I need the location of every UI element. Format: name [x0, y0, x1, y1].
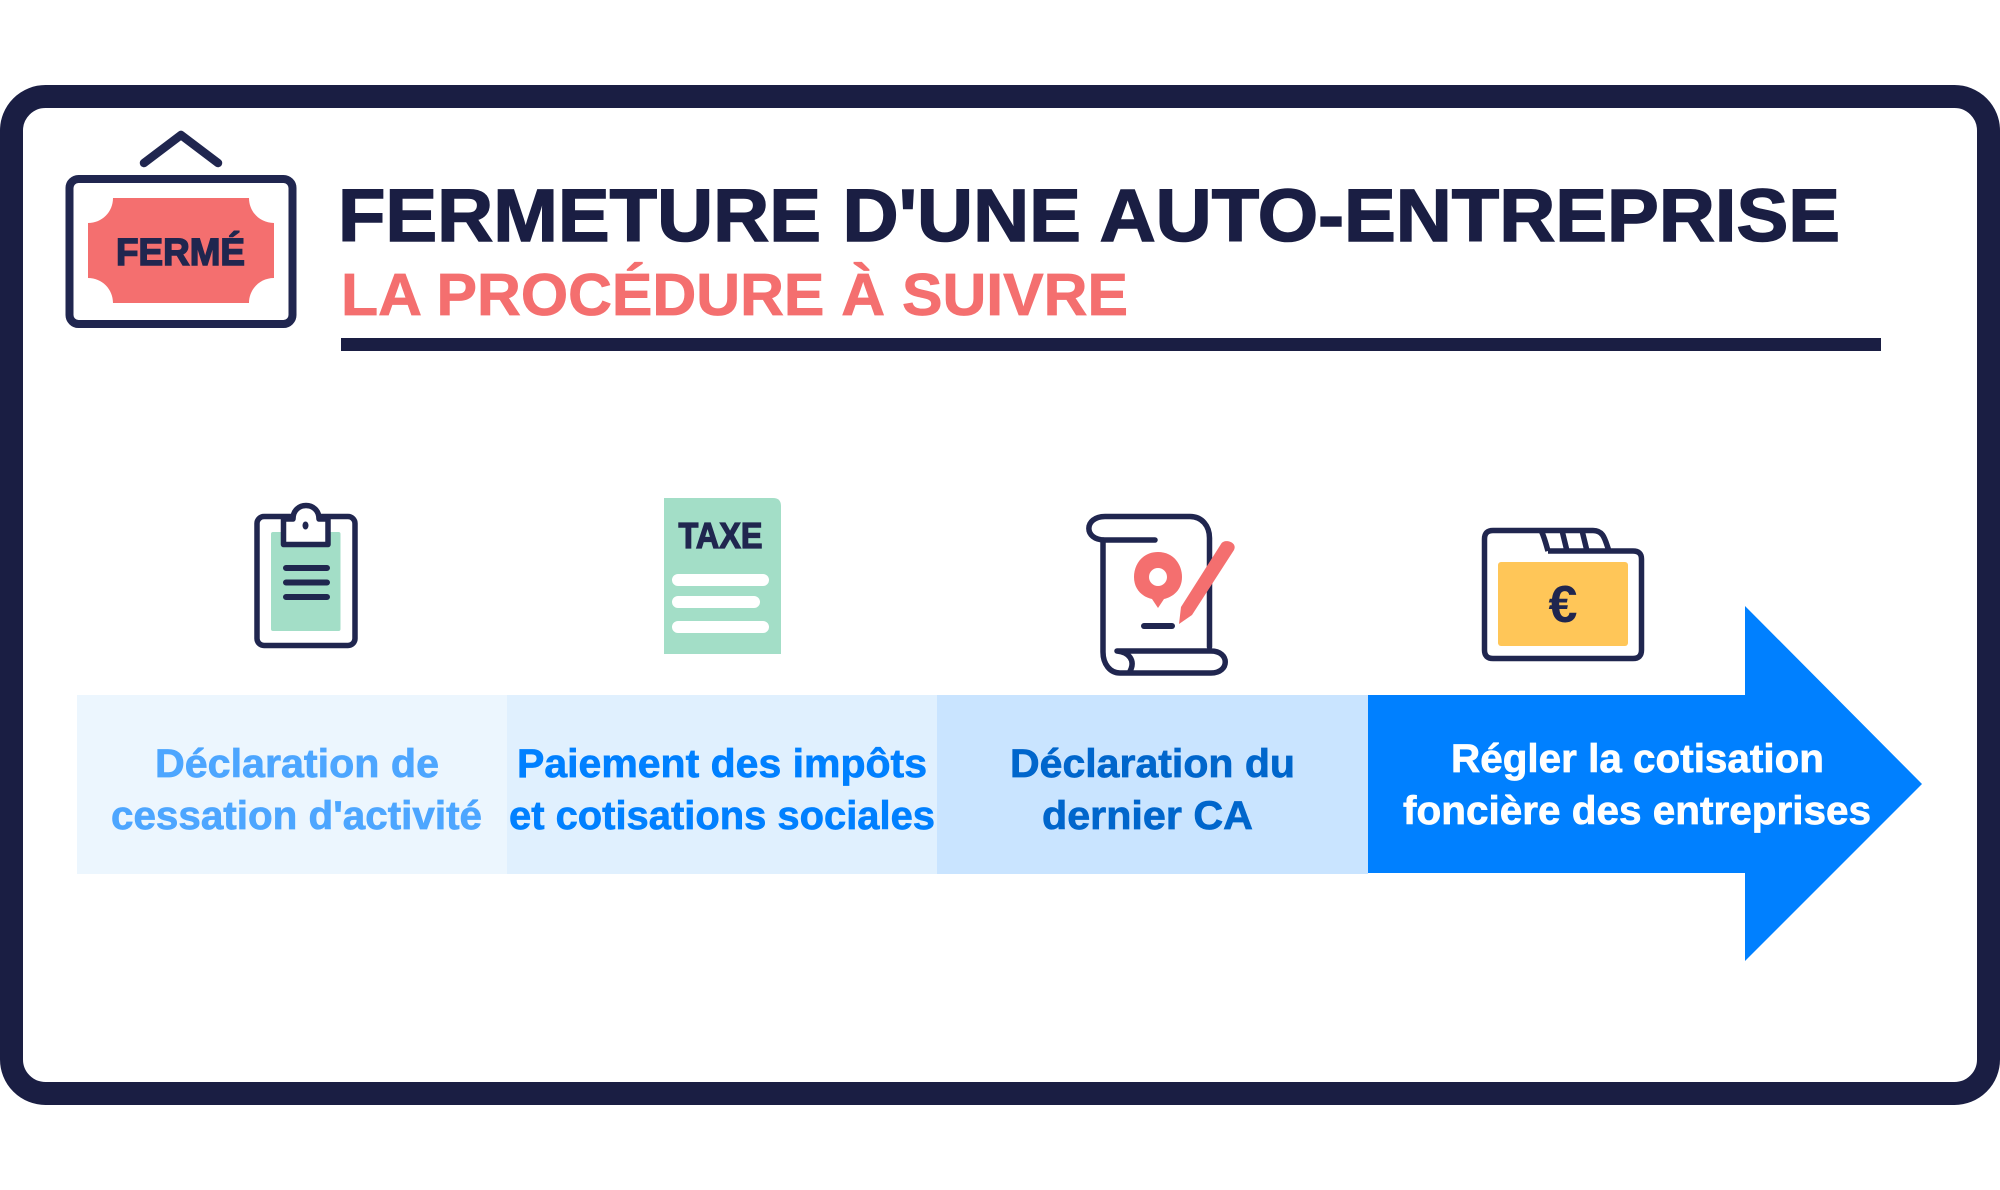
icon: clipboard [257, 506, 355, 646]
title: FERMETURE D'UNE AUTO-ENTREPRISE [338, 174, 1840, 257]
step 3: last revenue declaration: dernier CA [1042, 794, 1253, 838]
step 1: cessation declaration: Déclaration de [155, 742, 439, 786]
step 3: last revenue declaration [937, 695, 1368, 874]
step 1: cessation declaration [77, 695, 507, 874]
icon: scroll with pin and pen [1089, 516, 1235, 673]
step 2: tax payment [507, 695, 937, 874]
step 2: tax payment: et cotisations sociales [509, 794, 935, 838]
icon: folder with euro: € [1549, 576, 1577, 634]
title underline [341, 338, 1881, 351]
step 3: last revenue declaration: Déclaration du [1010, 742, 1295, 786]
step 4: final arrow [1368, 606, 1922, 961]
step 4: final arrow: foncière des entreprises [1403, 789, 1871, 833]
step 2: tax payment: Paiement des impôts [517, 742, 927, 786]
icon: closed sign: FERMÉ [116, 230, 245, 274]
icon: tax document [664, 498, 781, 654]
step 1: cessation declaration: cessation d'activité [111, 794, 482, 838]
icon: tax document: TAXE [678, 515, 762, 556]
icon: closed sign [70, 135, 292, 324]
step 4: final arrow: Régler la cotisation [1451, 737, 1824, 781]
subtitle: LA PROCÉDURE À SUIVRE [341, 262, 1128, 328]
icon: folder with euro [1484, 530, 1642, 658]
